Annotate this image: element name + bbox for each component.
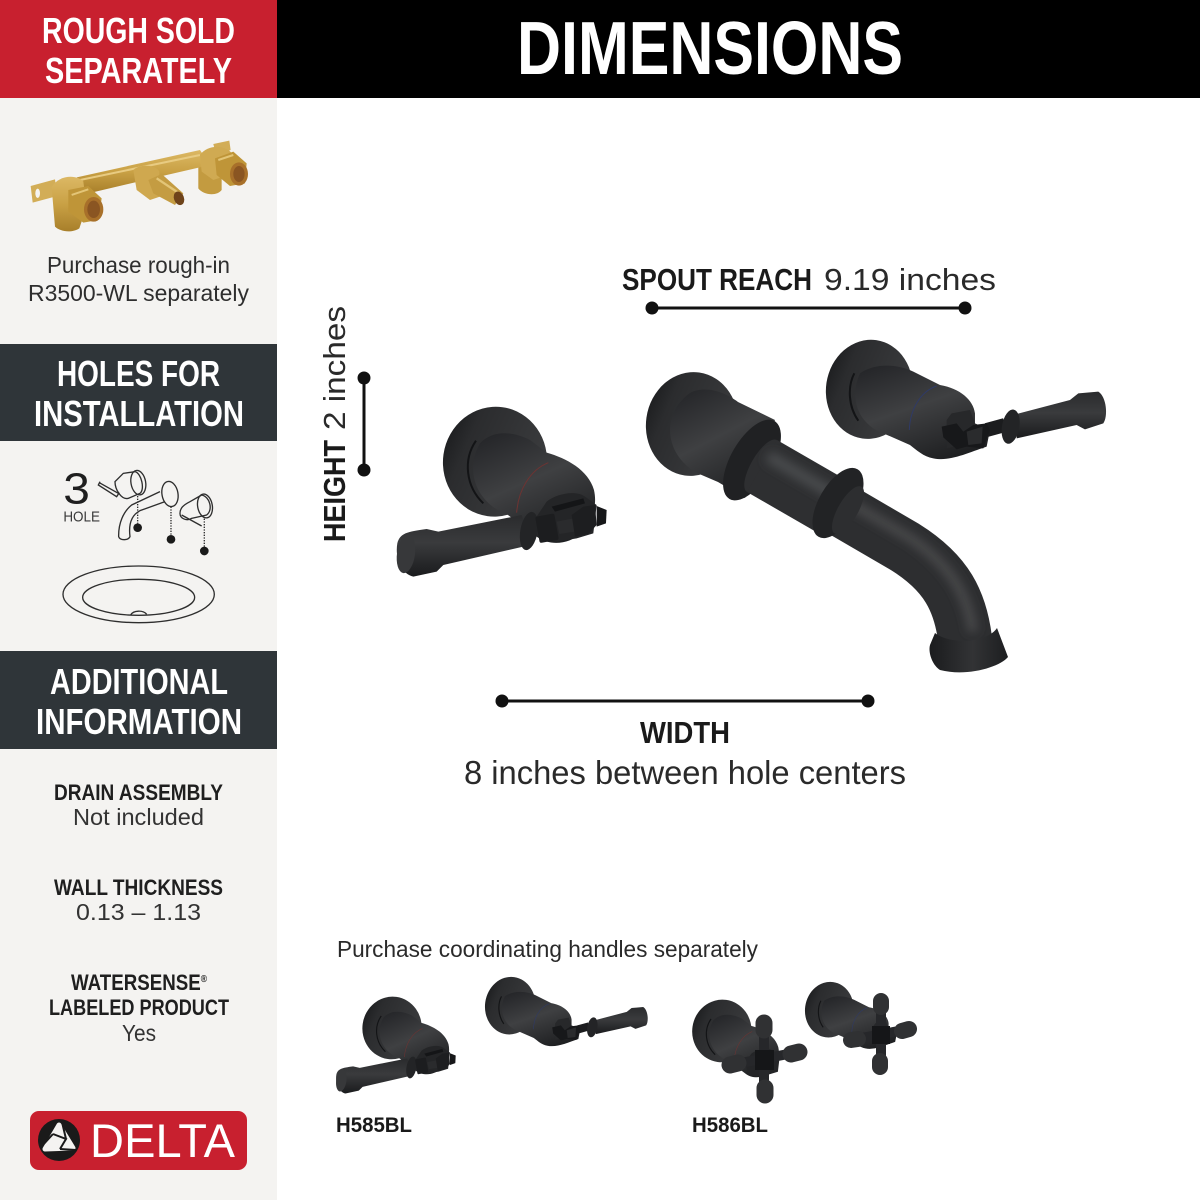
icon: three hole faucet and sink diagram: HOLE bbox=[63, 509, 100, 526]
banner: rough sold separately bbox=[0, 0, 277, 98]
dimension: height: HEIGHT bbox=[317, 440, 352, 542]
text: watersense labeled product: LABELED PRODUCT bbox=[49, 995, 229, 1020]
panel: left sidebar bbox=[0, 0, 277, 1200]
text: drain assembly: DRAIN ASSEMBLY bbox=[54, 780, 223, 805]
icon: three hole faucet and sink diagram: 3 bbox=[63, 465, 90, 513]
text: drain assembly: Not included bbox=[73, 804, 204, 830]
text: watersense labeled product: Yes bbox=[122, 1020, 156, 1046]
heading: holes for installation: HOLES FOR bbox=[57, 353, 220, 394]
dimension: spout reach: SPOUT REACH bbox=[622, 262, 812, 297]
heading: additional information: INFORMATION bbox=[36, 701, 242, 742]
product: H585BL left lever handle bbox=[335, 993, 456, 1094]
banner: rough sold separately: SEPARATELY bbox=[45, 50, 232, 91]
text: watersense labeled product: ® bbox=[201, 974, 208, 985]
faucet: left handle bbox=[394, 400, 607, 577]
heading: additional information bbox=[0, 651, 277, 749]
heading: additional information: ADDITIONAL bbox=[50, 661, 228, 702]
dimension: width: 8 inches between hole centers bbox=[464, 754, 906, 791]
text: wall thickness: WALL THICKNESS bbox=[54, 875, 223, 900]
dimension: spout reach bbox=[622, 262, 996, 314]
image: brass rough-in valve bbox=[31, 141, 248, 231]
dimension: height bbox=[317, 306, 370, 542]
product: H585BL right lever handle bbox=[481, 974, 648, 1046]
text: purchase rough-in: Purchase rough-in bbox=[47, 252, 230, 278]
dimension: spout reach: 9.19 inches bbox=[824, 262, 996, 297]
heading: holes for installation: INSTALLATION bbox=[34, 393, 244, 434]
text: wall thickness bbox=[54, 875, 223, 925]
text: purchase coordinating handles: Purchase coordinating handles separately bbox=[337, 936, 758, 962]
text: purchase rough-in bbox=[28, 252, 249, 306]
logo: delta bbox=[30, 1111, 247, 1170]
heading: holes for installation bbox=[0, 344, 277, 441]
text: watersense labeled product bbox=[49, 970, 229, 1046]
faucet: right handle bbox=[820, 334, 1106, 459]
product: H586BL right cross handle bbox=[801, 979, 909, 1067]
title: dimensions: DIMENSIONS bbox=[517, 6, 903, 90]
product: H586BL left cross handle bbox=[688, 996, 799, 1095]
dimension: height: 2 inches bbox=[317, 306, 352, 430]
dimension: width: WIDTH bbox=[640, 715, 730, 750]
label: H585BL: H585BL bbox=[336, 1114, 412, 1137]
logo: delta: DELTA bbox=[90, 1114, 236, 1167]
banner: rough sold separately: ROUGH SOLD bbox=[42, 10, 235, 51]
faucet: spout bbox=[639, 366, 1008, 672]
text: drain assembly bbox=[54, 780, 223, 830]
text: watersense labeled product: WATERSENSE bbox=[71, 970, 223, 995]
text: wall thickness: 0.13 – 1.13 bbox=[76, 899, 201, 925]
dimension: width bbox=[464, 694, 906, 791]
icon: three hole faucet and sink diagram bbox=[63, 465, 214, 623]
label: H586BL: H586BL bbox=[692, 1114, 768, 1137]
title: dimensions bbox=[277, 0, 1200, 98]
text: purchase rough-in: R3500-WL separately bbox=[28, 280, 249, 306]
